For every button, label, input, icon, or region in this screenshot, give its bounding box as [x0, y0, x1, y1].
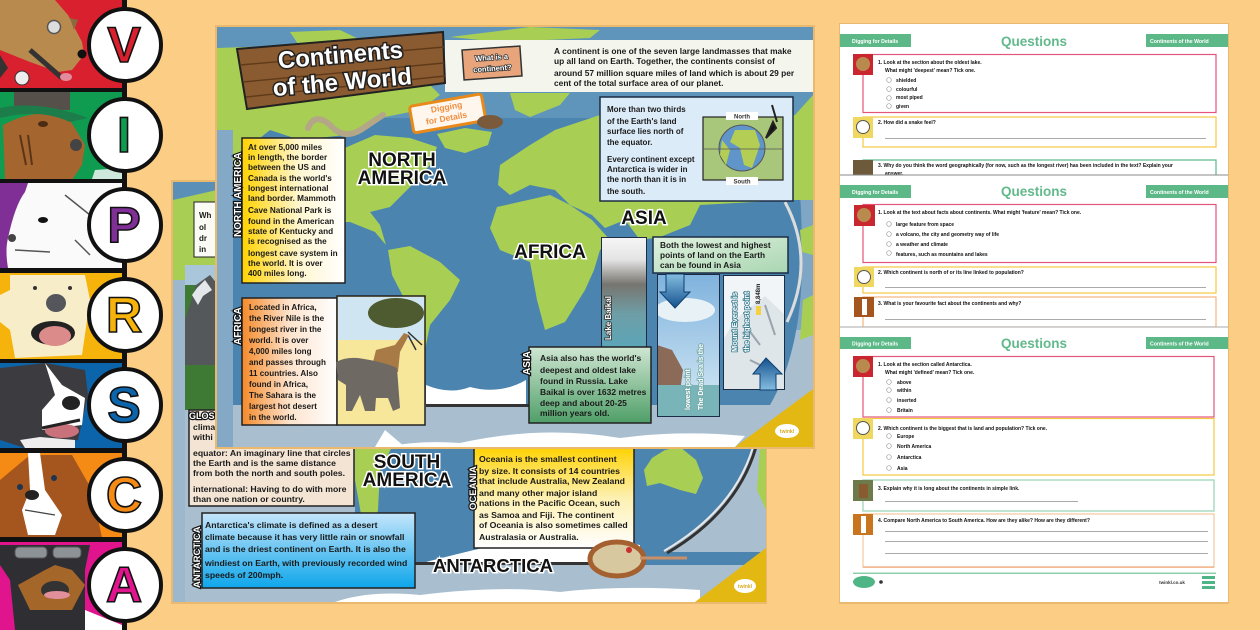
tag: digging for details: for Details: [425, 109, 468, 127]
info box: land north of equator: More than two thirds: [607, 105, 686, 114]
glossary box: international: Having to do with more: [193, 484, 347, 494]
Africa box: AFRICA: [233, 307, 244, 345]
letter badge S: S: [107, 377, 141, 433]
North America box: NORTH AMERICA: [233, 152, 244, 237]
North America box: longest cave system in: [248, 249, 338, 258]
letter badge P: P: [107, 197, 141, 253]
question 1: given: [896, 104, 909, 110]
Greenland land: [437, 128, 492, 153]
photo: Everest highest point: Mount Everest is: [730, 292, 739, 352]
Africa land: [490, 195, 610, 330]
icon: globe diagram: [703, 105, 783, 186]
definition strip: up all land on Earth. Together, the continents consist of: [554, 56, 775, 66]
question 1: colourful: [896, 87, 918, 93]
question 1: features, such as mountains and lakes: [896, 252, 988, 258]
question 2: [853, 418, 1214, 475]
Scandinavia land: [510, 93, 570, 117]
header tag left: Digging for Details: [852, 39, 898, 45]
label: North America: AMERICA: [358, 168, 447, 189]
question 1: shielded: [896, 78, 916, 84]
Asia box: Asia also has the world's: [540, 353, 641, 363]
label: South America: [363, 452, 452, 491]
savanna picture: elephant and giraffe: [336, 296, 425, 425]
South America land: [388, 246, 460, 350]
letter badge R: R: [106, 287, 142, 343]
glossary box: the Earth and is the same distance: [193, 458, 336, 468]
question 4: 4. Compare North America to South America. How are they alike? How are they different?: [878, 518, 1090, 524]
question 1: 1. Look at the section called Antarctica.: [878, 362, 972, 368]
Africa box: 11 countries. Also: [249, 369, 318, 378]
label: North America: NORTH: [368, 150, 436, 171]
header tag left: [840, 337, 911, 349]
North America box: land border. Mammoth: [248, 194, 336, 203]
letter badge R: [89, 279, 161, 351]
box: lowest and highest points: points of land on the Earth: [660, 250, 765, 260]
glossary box: GLOSSARY: [189, 411, 239, 421]
box: lowest and highest points: [653, 237, 788, 273]
letter badge C: [89, 459, 161, 531]
Africa box: longest river in the: [249, 325, 322, 334]
header tag right: [1146, 185, 1228, 198]
footer: [853, 572, 1216, 589]
North America box: the world. It is over: [248, 259, 323, 268]
glossary box: [189, 410, 354, 506]
photo: Lake Baikal: Lake Baikal: [604, 296, 613, 340]
Asia box: deep and about 20-25: [540, 398, 627, 408]
heading: Questions: Questions: [1001, 34, 1067, 49]
question 2: [853, 117, 1216, 147]
Oceania box: of Oceania is also sometimes called: [479, 520, 628, 530]
header tag right: Continents of the World: [1150, 342, 1209, 348]
box: lowest and highest points: can be found in Asia: [660, 260, 741, 270]
Antarctica box: speeds of 200mph.: [205, 570, 283, 580]
Asia box: found in Russia. Lake: [540, 376, 628, 386]
letter badge P: [89, 189, 161, 261]
strip I: green with hound: [0, 92, 122, 180]
glossary box: withi: [192, 432, 213, 442]
Africa box: largest hot desert: [249, 402, 317, 411]
glossary box: from both the north and south poles.: [193, 468, 345, 478]
photo: Dead Sea lowest point: The Dead Sea is the: [698, 344, 705, 410]
strip V: red with terrier: [0, 0, 122, 88]
header tag right: Continents of the World: [1150, 190, 1209, 196]
title sign: wooden board: Continents: [277, 37, 404, 74]
North America box: between the US and: [248, 163, 326, 172]
Africa box: the River Nile is the: [249, 314, 325, 323]
question 3: [854, 297, 1216, 327]
North America box: Cave National Park is: [248, 206, 332, 215]
Antarctica box: climate because it has very little rain or snowfall: [205, 532, 404, 542]
question 1: large feature from space: [896, 222, 954, 228]
worksheet page 2: [840, 174, 1228, 327]
question 1: a volcano, the city and geometry way of life: [896, 232, 999, 238]
glossary box: clima: [193, 422, 215, 432]
strip C: orange with spaniel: [0, 453, 122, 538]
North America box: in length, the border: [248, 153, 328, 162]
question 1: [854, 204, 1216, 262]
North America box: [233, 138, 345, 283]
icon: globe diagram: South: [734, 180, 751, 186]
Oceania box: OCEANIA: [468, 466, 479, 510]
question 2: North America: [897, 444, 931, 450]
letter badge I: I: [117, 107, 131, 163]
strip A: magenta with rottweiler: [0, 542, 122, 630]
label: North America: [358, 150, 447, 189]
question 3: answer.: [885, 171, 904, 177]
title sign: wooden board: of the World: [272, 63, 413, 102]
label: Asia: ASIA: [621, 208, 667, 229]
question 1: What might 'deepest' mean? Tick one.: [885, 68, 976, 74]
North America box: state of Kentucky and: [248, 227, 333, 236]
Alaska and Canada land: [217, 45, 440, 175]
poster: front sheet: [215, 25, 815, 449]
Antarctica box: ANTARCTICA: [192, 526, 203, 588]
poster: back sheet: [171, 180, 767, 604]
intro box on back sheet: dr: [199, 234, 207, 243]
tag: what is a continent: continent?: [473, 63, 512, 74]
Africa box: in the world.: [249, 413, 297, 422]
worksheet page 3: [840, 326, 1228, 602]
header tag left: [840, 34, 911, 47]
Antarctica box: and is the driest continent on Earth. It is also the: [205, 544, 406, 554]
letter badge V: V: [107, 17, 141, 73]
header tag right: [1146, 34, 1228, 47]
Oceania box: and many other major island: [479, 488, 597, 498]
question 2: Asia: [897, 466, 908, 472]
logo: back sheet: [734, 579, 756, 593]
North America box: 400 miles long.: [248, 269, 307, 278]
footer: twinkl.co.uk: [1159, 580, 1185, 585]
info box: land north of equator: the north than it is in: [607, 175, 686, 184]
photo: Dead Sea lowest point: [655, 274, 720, 417]
strip R: yellow with golden retriever: [0, 273, 122, 359]
question 1: 1. Look at the section about the oldest lake.: [878, 60, 982, 66]
heading: Questions: Questions: [1001, 184, 1067, 199]
logo: front sheet: [775, 424, 799, 438]
info box: land north of equator: [600, 97, 793, 201]
Asia box: [522, 347, 651, 423]
question 1: What might 'defined' mean? Tick one.: [885, 370, 975, 376]
Africa box: The Sahara is the: [249, 391, 317, 400]
definition strip: [445, 40, 813, 92]
photo: Everest highest point: [723, 275, 785, 390]
header tag right: [1146, 337, 1228, 349]
question 2: Antarctica: [897, 455, 922, 461]
question 1: [853, 356, 1214, 417]
question 3: 3. Why do you think the word geographically (for now, such as the longest river) has been included in the text? Explain your: [878, 163, 1173, 169]
worksheet stack: [839, 23, 1229, 604]
letter badge A: A: [106, 557, 142, 613]
North America box: longest international: [248, 184, 329, 193]
tag: digging for details: Digging: [430, 99, 463, 115]
Antarctica box: windiest on Earth, with previously recorded wind: [204, 558, 407, 568]
Oceania box: that include Australia, New Zealand: [479, 476, 625, 486]
question 3: 3. What is your favourite fact about the continents and why?: [878, 301, 1021, 307]
arrow: up: [753, 358, 782, 390]
definition strip: around 57 million square miles of land which is about 29 per: [554, 68, 795, 78]
info box: land north of equator: Antarctica is wider in: [607, 165, 688, 174]
strip S: blue with collie: [0, 363, 122, 448]
icon: globe diagram: North: [734, 114, 750, 120]
North America box: Canada is the world's: [248, 174, 332, 183]
Africa box: [233, 298, 337, 425]
header tag left: [840, 185, 911, 198]
Eurasia land: [498, 95, 813, 240]
box: lowest and highest points: Both the lowest and highest: [660, 240, 771, 250]
info box: land north of equator: surface lies north of: [607, 127, 684, 136]
question 1: above: [897, 380, 912, 386]
Oceania box: Australasia or Australia.: [479, 532, 579, 542]
question 2: Europe: [897, 434, 914, 440]
info box: land north of equator: the south.: [607, 187, 645, 196]
Africa box: and passes through: [249, 358, 326, 367]
photo: Everest highest point: 8,848m: [756, 284, 762, 304]
Africa box: 4,000 miles long: [249, 347, 312, 356]
Antarctica box: [192, 513, 415, 588]
sidebar: VIPERS dog strips: [0, 0, 161, 630]
logo: front sheet: twinkl: [780, 429, 795, 435]
intro box on back sheet: Wh: [199, 211, 212, 220]
question 3: [853, 160, 1216, 177]
Oceania box: by size. It consists of 14 countries: [479, 466, 620, 476]
photo: Everest highest point: the highest point: [742, 291, 751, 352]
Oceania box: nations in the Pacific Ocean, such: [479, 498, 620, 508]
label: Antarctica: ANTARCTICA: [433, 555, 553, 576]
worksheet page 1: [840, 24, 1228, 177]
intro box on back sheet: in: [199, 245, 206, 254]
info box: land north of equator: of the Earth's land: [607, 117, 677, 126]
question 1: a weather and climate: [896, 242, 948, 248]
photo: Dead Sea lowest point: lowest point: [685, 368, 692, 410]
question 1: within: [896, 388, 911, 394]
Africa box: found in Africa,: [249, 380, 308, 389]
North America box: At over 5,000 miles: [248, 143, 323, 152]
North America box: is recognised as the: [248, 237, 327, 246]
Antarctica box: Antarctica's climate is defined as a desert: [205, 520, 378, 530]
mountain photo on back sheet: [185, 265, 218, 410]
question 1: most piped: [896, 95, 923, 101]
tag: digging for details: [409, 94, 503, 133]
icon: snake on map: [308, 115, 383, 134]
photo: Lake Baikal: [601, 237, 647, 350]
glossary box: than one nation or country.: [193, 494, 305, 504]
intro box on back sheet: ol: [199, 223, 206, 232]
Oceania box: as Samoa and Fiji. The continent: [479, 510, 614, 520]
North America land: [340, 135, 437, 245]
letter badge I: [89, 99, 161, 171]
question 1: [853, 54, 1216, 112]
world map: [217, 27, 813, 447]
Asia box: ASIA: [522, 351, 533, 375]
Africa box: Located in Africa,: [249, 303, 317, 312]
North America box: found in the American: [248, 217, 334, 226]
icon: coiled snake: [590, 542, 687, 576]
label: South America: SOUTH: [374, 452, 440, 473]
Oceania box: [468, 447, 634, 548]
Africa box: world. It is over: [248, 336, 309, 345]
question 1: 1. Look at the text about facts about continents. What might 'feature' mean? Tick one.: [878, 210, 1082, 216]
header tag left: Digging for Details: [852, 342, 898, 348]
question 2: 2. How did a snake feel?: [878, 120, 936, 126]
question 1: Britain: [897, 408, 913, 414]
header tag left: Digging for Details: [852, 190, 898, 196]
definition strip: A continent is one of the seven large landmasses that make: [554, 46, 792, 56]
question 2: 2. Which continent is north of or its line linked to population?: [878, 270, 1024, 276]
info box: land north of equator: the equator.: [607, 138, 652, 147]
letter badge S: [89, 369, 161, 441]
strip P: purple with white dog: [0, 183, 122, 268]
label: Africa: AFRICA: [514, 242, 586, 263]
Asia box: Baikal is over 1632 metres: [540, 387, 647, 397]
letter badge V: [89, 9, 161, 81]
arrow: down: [660, 274, 690, 308]
definition strip: cent of the total surface area of our planet.: [554, 78, 723, 88]
label: South America: AMERICA: [363, 470, 452, 491]
Asia box: deepest and oldest lake: [540, 365, 636, 375]
glossary box: equator: An imaginary line that circles: [193, 448, 351, 458]
question 1: inserted: [897, 398, 916, 404]
header tag right: Continents of the World: [1150, 39, 1209, 45]
letter badge A: [89, 549, 161, 621]
Oceania box: Oceania is the smallest continent: [479, 454, 617, 464]
letter badge C: C: [106, 467, 142, 523]
tag: what is a continent: What is a: [475, 52, 509, 63]
intro box on back sheet: [194, 202, 218, 257]
logo: back sheet: twinkl: [738, 584, 753, 590]
title sign: wooden board: [237, 32, 445, 109]
heading: Questions: Questions: [1001, 336, 1067, 351]
question 2: [854, 267, 1216, 293]
question 3: 3. Explain why it is long about the continents in simple link.: [878, 486, 1020, 492]
question 3: [853, 480, 1214, 511]
tag: what is a continent: [462, 46, 522, 80]
Asia box: million years old.: [540, 408, 609, 418]
info box: land north of equator: Every continent except: [607, 155, 695, 164]
question 2: 2. Which continent is the biggest that is land and population? Tick one.: [878, 426, 1048, 432]
question 4: [853, 514, 1214, 568]
